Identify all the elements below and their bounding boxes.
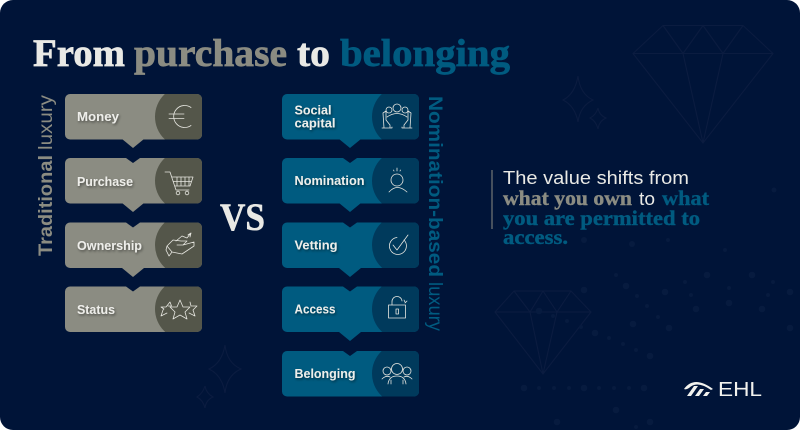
card: Access: Access	[294, 302, 336, 316]
vertical label: Nomination-based luxury: luxury	[424, 282, 445, 331]
title: belonging	[340, 32, 511, 75]
card: Access	[282, 286, 419, 332]
callout text: to	[639, 189, 655, 209]
card: Vetting: Vetting	[294, 238, 338, 252]
card: Social capital	[282, 94, 419, 140]
title	[33, 32, 511, 75]
card: Belonging: Belonging	[294, 366, 356, 381]
card: Money: Money	[77, 109, 120, 124]
card: Money	[65, 94, 202, 140]
callout text: The value shifts from	[503, 168, 689, 188]
card: Status	[65, 286, 202, 332]
icon: three stars	[161, 300, 197, 319]
title: purchase	[134, 32, 287, 75]
icon: check circle	[389, 235, 408, 254]
VS: VS	[220, 196, 265, 239]
vertical label: Nomination-based luxury: Nomination-based	[424, 96, 445, 277]
callout text: what	[662, 186, 709, 210]
card: Status: Status	[77, 302, 115, 317]
logo: EHL: EHL	[718, 379, 762, 401]
icon: person with spark	[389, 168, 407, 192]
logo mark	[684, 382, 713, 396]
card: Vetting	[282, 222, 419, 268]
card: Ownership	[65, 222, 202, 268]
icon: shopping cart	[165, 172, 193, 195]
icon: hand with growth	[166, 233, 194, 256]
card: Ownership: Ownership	[77, 238, 142, 253]
card: Social capital: Social	[294, 102, 332, 118]
connector arrows: nomination	[339, 139, 361, 341]
callout divider	[492, 170, 493, 229]
callout text: you are permitted to	[503, 206, 700, 230]
icon: hands and people	[382, 104, 412, 128]
card: Social capital: capital	[294, 116, 336, 130]
decoration: bottom sparkles	[197, 345, 241, 408]
card: Belonging	[282, 351, 419, 396]
card: Purchase	[65, 158, 202, 204]
callout text: what you own	[503, 186, 632, 210]
callout text	[503, 168, 709, 249]
decoration: lower diamond	[495, 291, 591, 374]
icon: euro	[169, 106, 191, 128]
title: to	[297, 32, 330, 75]
connector arrows: traditional	[122, 139, 144, 277]
callout text: access.	[503, 225, 568, 249]
card: Purchase: Purchase	[77, 174, 133, 189]
card: Nomination: Nomination	[294, 173, 365, 188]
icon: group of people	[382, 364, 412, 384]
icon: open padlock	[388, 296, 407, 318]
title: From	[33, 32, 125, 75]
decoration: top right diamond	[633, 26, 773, 143]
logo: EHL	[684, 379, 762, 401]
vertical label: Traditional luxury: luxury	[36, 94, 57, 150]
vertical label: Traditional luxury: Traditional	[36, 155, 57, 256]
vertical label: Traditional luxury	[36, 94, 57, 256]
decoration: top sparkles	[563, 76, 606, 129]
card: Nomination	[282, 158, 419, 204]
decoration: dot pattern	[521, 188, 793, 429]
